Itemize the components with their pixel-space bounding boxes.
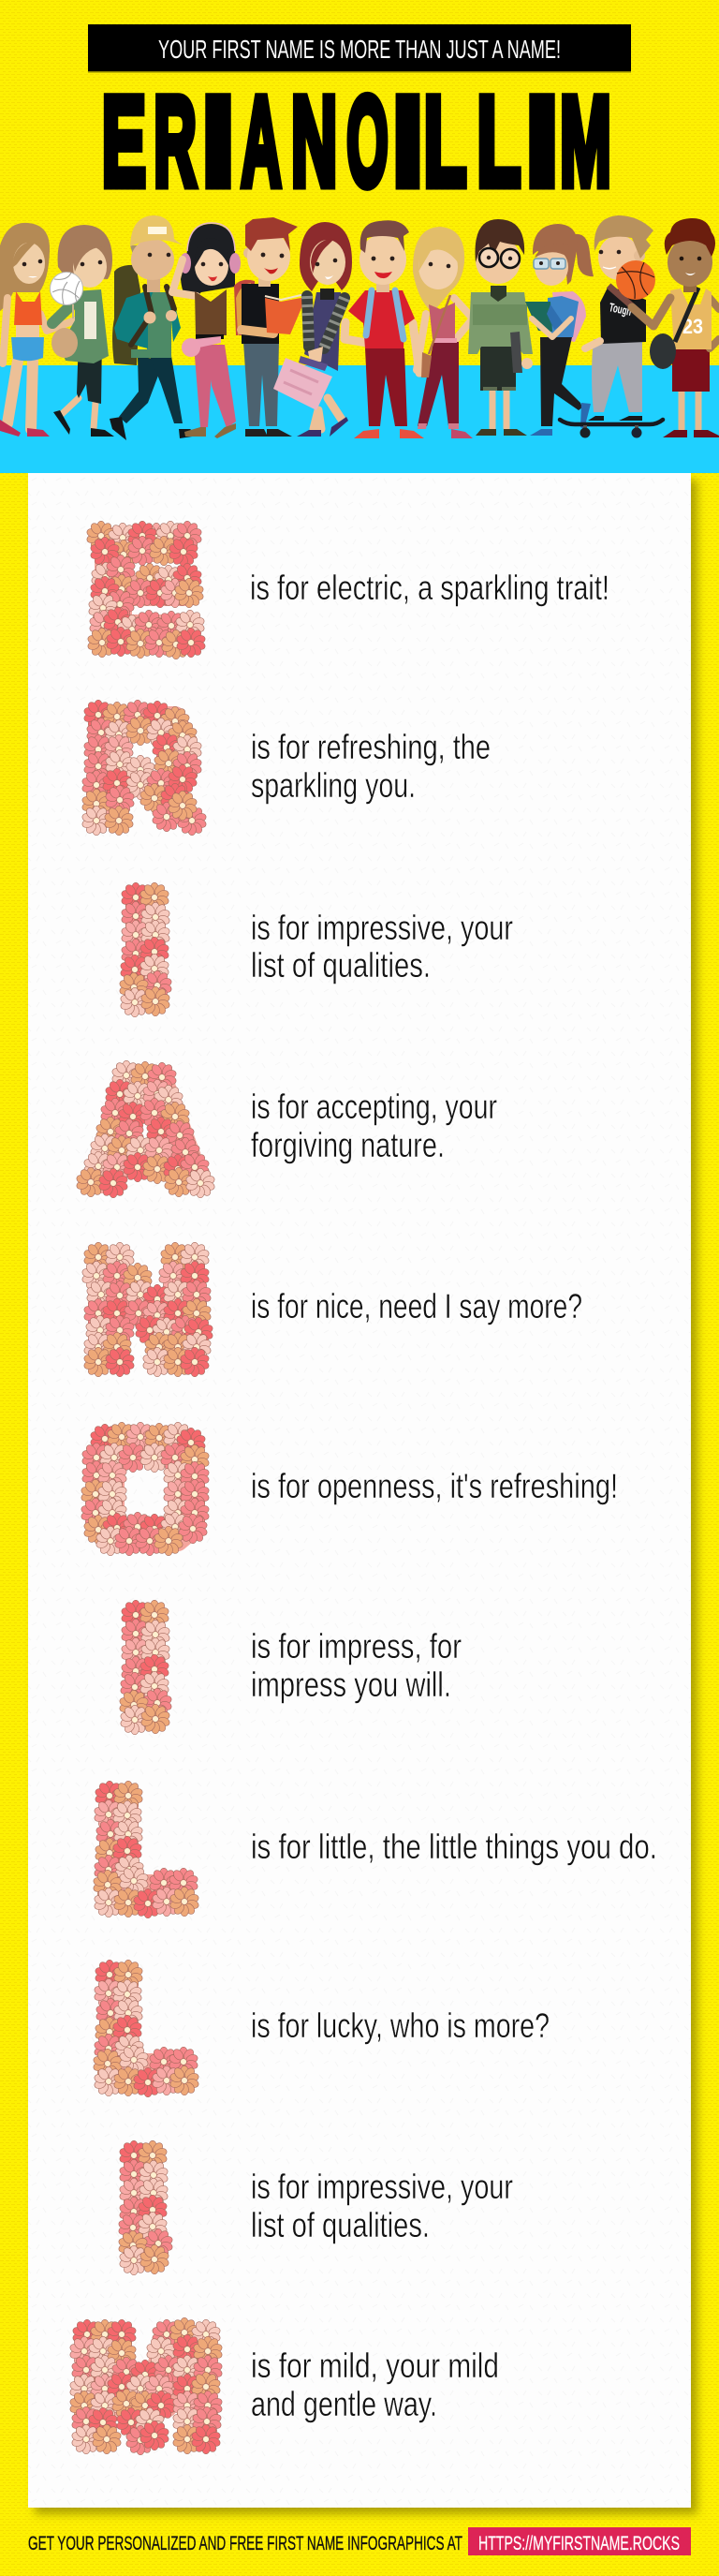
text: A: forgiving nature. (251, 1126, 445, 1164)
letter R (81, 700, 207, 836)
blue floor band (0, 365, 719, 473)
text: A: is for accepting, your (251, 1088, 497, 1126)
text: N: is for nice, need I say more? (251, 1287, 582, 1325)
title: name: E (102, 69, 146, 212)
person 3: boy with backpack and cap (110, 215, 198, 440)
person 2: girl with volleyball (51, 225, 114, 437)
text: I second: is for impress, for (251, 1627, 462, 1666)
letter L (93, 1781, 199, 1918)
person 6: girl with pink bag (273, 222, 352, 437)
text: I second: impress you will. (251, 1666, 451, 1704)
letter M (69, 2317, 223, 2455)
title: name: R (154, 69, 197, 212)
text: M: is for mild, your mild (251, 2347, 499, 2385)
letter I (third) (118, 2140, 173, 2275)
text: R (251, 728, 491, 805)
white content panel (28, 473, 691, 2508)
letter E (86, 521, 206, 659)
person 8: blonde girl (413, 227, 473, 438)
text: M: and gentle way. (251, 2385, 437, 2423)
text: L second: is for lucky, who is more? (251, 2006, 550, 2045)
text: O: is for openness, it's refreshing! (251, 1467, 618, 1505)
person 11: skater with basketball: Tough (608, 300, 633, 318)
person 12: boy in yellow tank top: 23 (682, 315, 703, 338)
text: I second (251, 1627, 462, 1704)
person 9: boy with glasses (468, 219, 533, 436)
title: name: A (242, 69, 281, 212)
person 10: girl with ponytail and tablet (525, 224, 594, 436)
text: R: is for refreshing, the (251, 728, 491, 766)
skateboard (560, 420, 663, 438)
letter I (119, 882, 172, 1017)
letter A (76, 1060, 215, 1198)
basketball (616, 260, 655, 300)
text: I third: list of qualities. (251, 2206, 430, 2244)
text: R: sparkling you. (251, 766, 416, 805)
text: I third: is for impressive, your (251, 2168, 513, 2206)
footer url button (468, 2527, 691, 2555)
title: name: I (202, 69, 234, 212)
person 11: skater with basketball (585, 215, 653, 421)
text: M (560, 69, 611, 212)
illustration: group of young people (0, 215, 719, 440)
person 5: boy with book (234, 217, 306, 437)
text: I: is for impressive, your (251, 909, 513, 947)
person 7: boy in red shirt (345, 220, 424, 438)
title: name: I (526, 69, 558, 212)
letter O (81, 1422, 210, 1556)
title: name: L (423, 69, 466, 212)
letter L (second) (93, 1960, 199, 2097)
text: I: list of qualities. (251, 946, 431, 985)
person 1: girl in orange top (0, 223, 75, 437)
text: I third (251, 2168, 513, 2244)
text: I (251, 909, 513, 985)
person 4: girl with pink headphones (172, 223, 241, 438)
footer call to action: GET YOUR PERSONALIZED AND FREE FIRST NAME INFOGRAPHICS AT (28, 2533, 462, 2554)
text: M (251, 2347, 499, 2423)
title: name: L (477, 69, 521, 212)
volleyball (51, 272, 82, 318)
title: name: O (346, 69, 389, 212)
title: name: N (291, 69, 337, 212)
letter N (81, 1242, 213, 1377)
text: A (251, 1088, 497, 1164)
text: E: is for electric, a sparkling trait! (250, 569, 609, 607)
title: name: I (392, 69, 423, 212)
person 12: boy in yellow tank top (632, 218, 719, 437)
letter I (second) (119, 1600, 172, 1735)
top banner (88, 24, 631, 73)
